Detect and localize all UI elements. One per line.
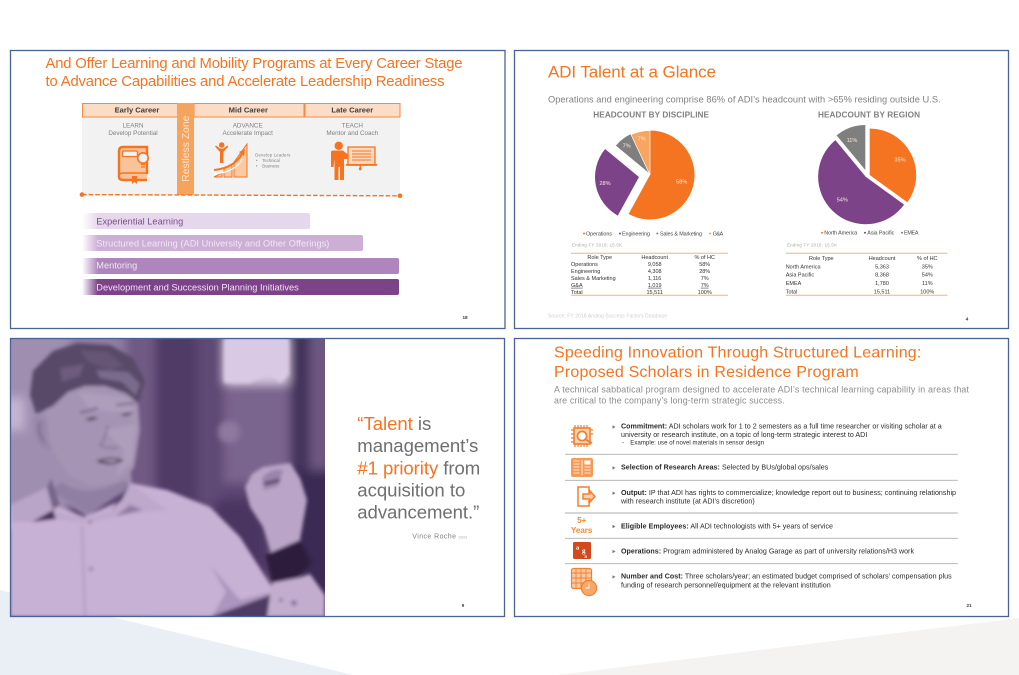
note: ending FY discipline: Ending FY 2018: 15.5K — [572, 242, 622, 247]
subtitle: Operations and engineering comprise 86% of ADI’s headcount with >65% residing outside U.S. — [548, 95, 941, 105]
table: discipline: 1,019 — [648, 283, 662, 289]
text: advance — [222, 123, 273, 137]
text: advance: ADVANCE — [233, 123, 263, 130]
text: develop leaders: Technical — [262, 158, 280, 163]
text: develop leaders: Business — [262, 164, 279, 169]
row: operations: Operations: Program administered by Analog Garage as part of university relations/H3 work — [621, 547, 914, 555]
table: region: 54% — [922, 273, 933, 279]
icon: calendar and clock — [572, 568, 597, 596]
row: commitment: Commitment: ADI scholars work for 1 to 2 semesters as a full time researcher or visiting scholar at a — [621, 423, 942, 431]
quote — [357, 413, 480, 523]
pie chart: headcount by discipline — [595, 130, 695, 219]
row: commitment: university or research institute, on a topic of long-term strategic interest to ADI — [621, 431, 867, 439]
table: region: 8,368 — [875, 273, 889, 279]
bar: experiential learning — [82, 213, 310, 229]
table: region: 11% — [922, 281, 933, 287]
timeline: dashed arrow — [80, 192, 402, 198]
text: learn: Develop Potential — [108, 130, 158, 137]
legend: discipline: Operations — [586, 231, 612, 237]
icon: person and growth chart — [214, 142, 247, 177]
table: discipline: G&A — [571, 283, 583, 289]
table: discipline: 100% — [698, 290, 712, 296]
legend: discipline — [583, 231, 724, 237]
row: number and cost: funding of research personnel/equipment at the relevant institution — [621, 581, 831, 589]
row: output — [612, 489, 956, 505]
table: region: EMEA — [786, 281, 802, 287]
bar: development and succession: Development and Succession Planning Initiatives — [96, 282, 299, 292]
source note: Source: FY 2018 Analog Success Factors Database — [548, 314, 667, 320]
header: early career — [82, 104, 178, 117]
table: region: % of HC — [917, 256, 938, 262]
table: region: 5,363 — [875, 264, 889, 270]
subtitle: A technical sabbatical program designed to accelerate ADI’s technical learning capability in areas that — [554, 384, 970, 394]
text: develop leaders: Develop Leaders — [255, 152, 290, 157]
background shape: right — [557, 618, 1019, 675]
icon: 5+ years — [571, 516, 593, 535]
face — [46, 384, 142, 471]
quote: “Talent is — [357, 413, 431, 434]
title: speeding innovation: Proposed Scholars in Residence Program — [554, 364, 859, 381]
table: region — [786, 253, 947, 295]
page number: 4 — [966, 316, 969, 322]
icon: chip with magnifier — [571, 425, 593, 447]
brows eyes nose mouth — [80, 408, 98, 413]
hair — [30, 343, 145, 414]
background shape: left — [0, 590, 353, 675]
note: ending FY region: Ending FY 2018: 15.5K — [787, 242, 837, 247]
hand — [245, 463, 307, 560]
pie chart: headcount by region: 35% — [894, 157, 906, 163]
text: learn: LEARN — [122, 123, 144, 130]
table: region: 100% — [920, 289, 934, 295]
icon: 5+ years: Years — [571, 526, 593, 535]
restless zone band: Restless Zone — [181, 115, 192, 182]
row: selection: Selection of Research Areas: Selected by BUs/global ops/sales — [621, 464, 829, 472]
page number: 18 — [462, 315, 468, 320]
table: discipline — [571, 253, 728, 296]
icon: analog garage — [573, 542, 591, 559]
pie chart: headcount by region: 11% — [847, 138, 857, 144]
photo: Vince Roche — [11, 339, 325, 616]
header: late career: Late Career — [331, 106, 373, 115]
legend: discipline: Sales & Marketing — [660, 231, 702, 237]
title: learning and mobility — [46, 56, 462, 90]
pie chart: headcount by discipline: 7% — [638, 136, 646, 142]
table: discipline: Engineering — [571, 269, 600, 275]
title: speeding innovation: Speeding Innovation Through Structured Learning: — [554, 345, 921, 362]
bar: experiential learning: Experiential Learning — [96, 216, 183, 226]
quote: acquisition to — [357, 479, 465, 500]
title: speeding innovation — [554, 345, 921, 381]
table: discipline: Operations — [571, 262, 598, 268]
text: teach — [326, 123, 379, 137]
quote: advancement.” — [357, 502, 479, 523]
legend: region: Asia Pacific — [867, 230, 895, 236]
table: discipline: 7% — [701, 276, 709, 282]
shirt — [10, 483, 274, 617]
panel: career stage programs — [10, 50, 505, 328]
table: discipline: Headcount — [641, 255, 668, 261]
icon: teacher at board — [331, 142, 377, 180]
row: number and cost — [612, 573, 952, 589]
header: mid career: Mid Career — [229, 106, 268, 115]
table: region: 1,780 — [875, 281, 889, 287]
table: region: North America — [786, 264, 821, 270]
cuff — [267, 574, 325, 617]
table: discipline: 7% — [701, 283, 709, 289]
text: develop leaders: • — [256, 164, 258, 169]
attribution: Vince Roche — [412, 534, 456, 541]
row: eligible employees: Eligible Employees: All ADI technologists with 5+ years of service — [621, 522, 833, 530]
header: late career — [305, 104, 400, 117]
table: discipline: 4,308 — [648, 269, 662, 275]
row: commitment: Example: use of novel materials in sensor design — [630, 441, 764, 447]
watch — [265, 540, 312, 583]
attribution: CEO — [458, 535, 467, 540]
legend: region — [821, 230, 919, 236]
table: discipline: % of HC — [694, 255, 715, 261]
text: advance: Accelerate Impact — [222, 130, 273, 137]
header: mid career — [194, 104, 304, 117]
table: discipline: Total — [571, 290, 583, 296]
quote: #1 priority from — [357, 457, 480, 478]
pie chart: headcount by region: 54% — [837, 197, 848, 203]
restless zone band — [177, 103, 194, 195]
table: discipline: 15,511 — [646, 290, 663, 296]
title: learning and mobility: And Offer Learning and Mobility Programs at Every Career Stage — [46, 56, 462, 72]
ear — [44, 433, 46, 444]
table: region: Headcount — [869, 256, 896, 262]
window highlight — [224, 338, 289, 383]
pie chart: headcount by discipline: 58% — [676, 180, 687, 186]
row: commitment: - — [622, 441, 624, 447]
heading: discipline: HEADCOUNT BY DISCIPLINE — [593, 111, 710, 120]
bar: mentoring: Mentoring — [96, 261, 137, 271]
subtitle — [554, 384, 970, 406]
page number: 9 — [462, 603, 465, 609]
row: number and cost: Number and Cost: Three scholars/year; an estimated budget comprised of scholars’ compensation plus — [621, 573, 952, 581]
subtitle: are critical to the company’s long-term strategic success. — [554, 396, 785, 406]
icon: book with light bulb — [119, 147, 148, 184]
icon: analog garage: a — [576, 544, 580, 552]
title: ADI talent: ADI Talent at a Glance — [548, 63, 716, 82]
text: teach: TEACH — [342, 123, 363, 130]
pie chart: headcount by discipline: 28% — [599, 181, 611, 187]
table: discipline: Sales & Marketing — [571, 276, 616, 282]
table: discipline: 28% — [699, 269, 710, 275]
table: region: 15,511 — [874, 289, 890, 295]
bar: mentoring — [82, 258, 399, 274]
row: output: with research institute (at ADI’s discretion) — [620, 497, 755, 505]
text: teach: Mentor and Coach — [326, 130, 379, 137]
pie chart: headcount by discipline: 7% — [623, 144, 631, 150]
row: commitment — [612, 423, 942, 447]
text: develop leaders: • — [256, 158, 258, 163]
neck — [64, 470, 134, 518]
bar: structured learning — [82, 235, 363, 251]
panel: CEO quote — [0, 330, 504, 630]
table: region: Role Type — [809, 256, 834, 262]
legend: discipline: G&A — [713, 231, 724, 237]
table: region: Asia Pacific — [786, 273, 814, 279]
quote: management’s — [357, 435, 478, 456]
table: discipline: Role Type — [587, 255, 612, 261]
table: region: Total — [786, 289, 797, 295]
row: output: Output: IP that ADI has rights to commercialize; knowledge report out to business; continuing relationship — [621, 489, 956, 497]
career stage table — [82, 103, 400, 195]
bar: development and succession — [82, 279, 399, 295]
panel: talent at a glance — [514, 50, 1008, 328]
icon: analog garage: g — [582, 547, 586, 555]
icon: document arrow — [578, 487, 595, 506]
pie chart: headcount by region — [818, 125, 916, 224]
text: learn — [108, 123, 158, 137]
text: develop leaders — [255, 152, 290, 169]
icon: open book — [571, 458, 593, 477]
title: learning and mobility: to Advance Capabilities and Accelerate Leadership Readiness — [46, 74, 444, 90]
row dividers — [565, 454, 958, 564]
page number: 21 — [966, 603, 972, 608]
legend: discipline: Engineering — [622, 231, 650, 237]
icon: 5+ years: 5+ — [577, 516, 587, 525]
table: discipline: 9,058 — [648, 262, 662, 268]
bar: structured learning: Structured Learning (ADI University and Other Offerings) — [96, 239, 329, 249]
legend: region: North America — [824, 230, 857, 236]
table: discipline: 1,116 — [648, 276, 661, 282]
header: early career: Early Career — [115, 106, 159, 115]
table: discipline: 58% — [699, 262, 710, 268]
heading: region: HEADCOUNT BY REGION — [818, 111, 920, 120]
icon: analog garage: n — [584, 554, 588, 559]
panel: scholars in residence — [514, 338, 1008, 616]
legend: region: EMEA — [904, 230, 919, 236]
table: region: 35% — [922, 264, 933, 270]
